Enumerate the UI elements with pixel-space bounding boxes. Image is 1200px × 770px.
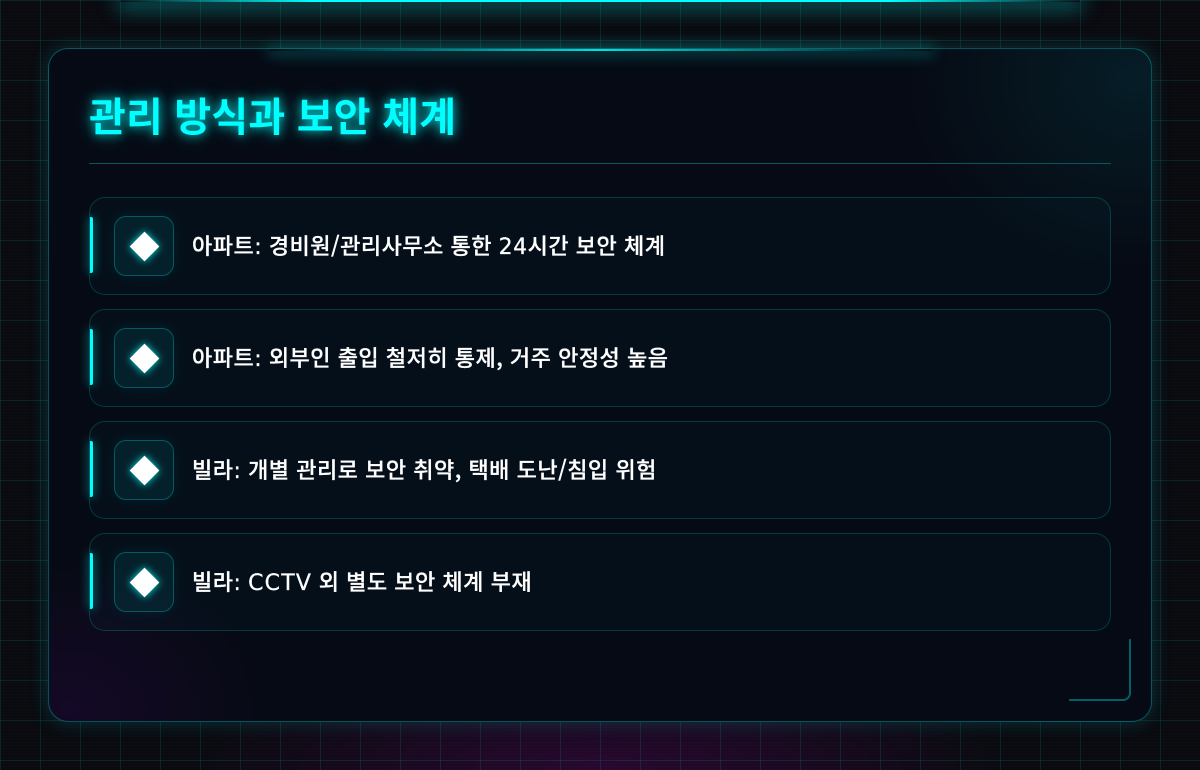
text block: 아파트: 경비원/관리사무소 통한 24시간 보안 체계 [192,229,665,261]
list item: villa weak security [89,421,1111,519]
title: 관리 방식과 보안 체계 [89,85,456,143]
icon: diamond [114,552,174,612]
icon: diamond [114,440,174,500]
icon: diamond [114,216,174,276]
list item: apartment 24-hour security [89,197,1111,295]
icon: diamond [114,328,174,388]
list item: apartment access control [89,309,1111,407]
decorative corner bracket [1069,639,1131,701]
list item: villa no CCTV alternative [89,533,1111,631]
text block: 아파트: 외부인 출입 철저히 통제, 거주 안정성 높음 [192,341,668,373]
text block: 빌라: CCTV 외 별도 보안 체계 부재 [192,565,532,597]
text block: 빌라: 개별 관리로 보안 취약, 택배 도난/침입 위험 [192,453,657,485]
